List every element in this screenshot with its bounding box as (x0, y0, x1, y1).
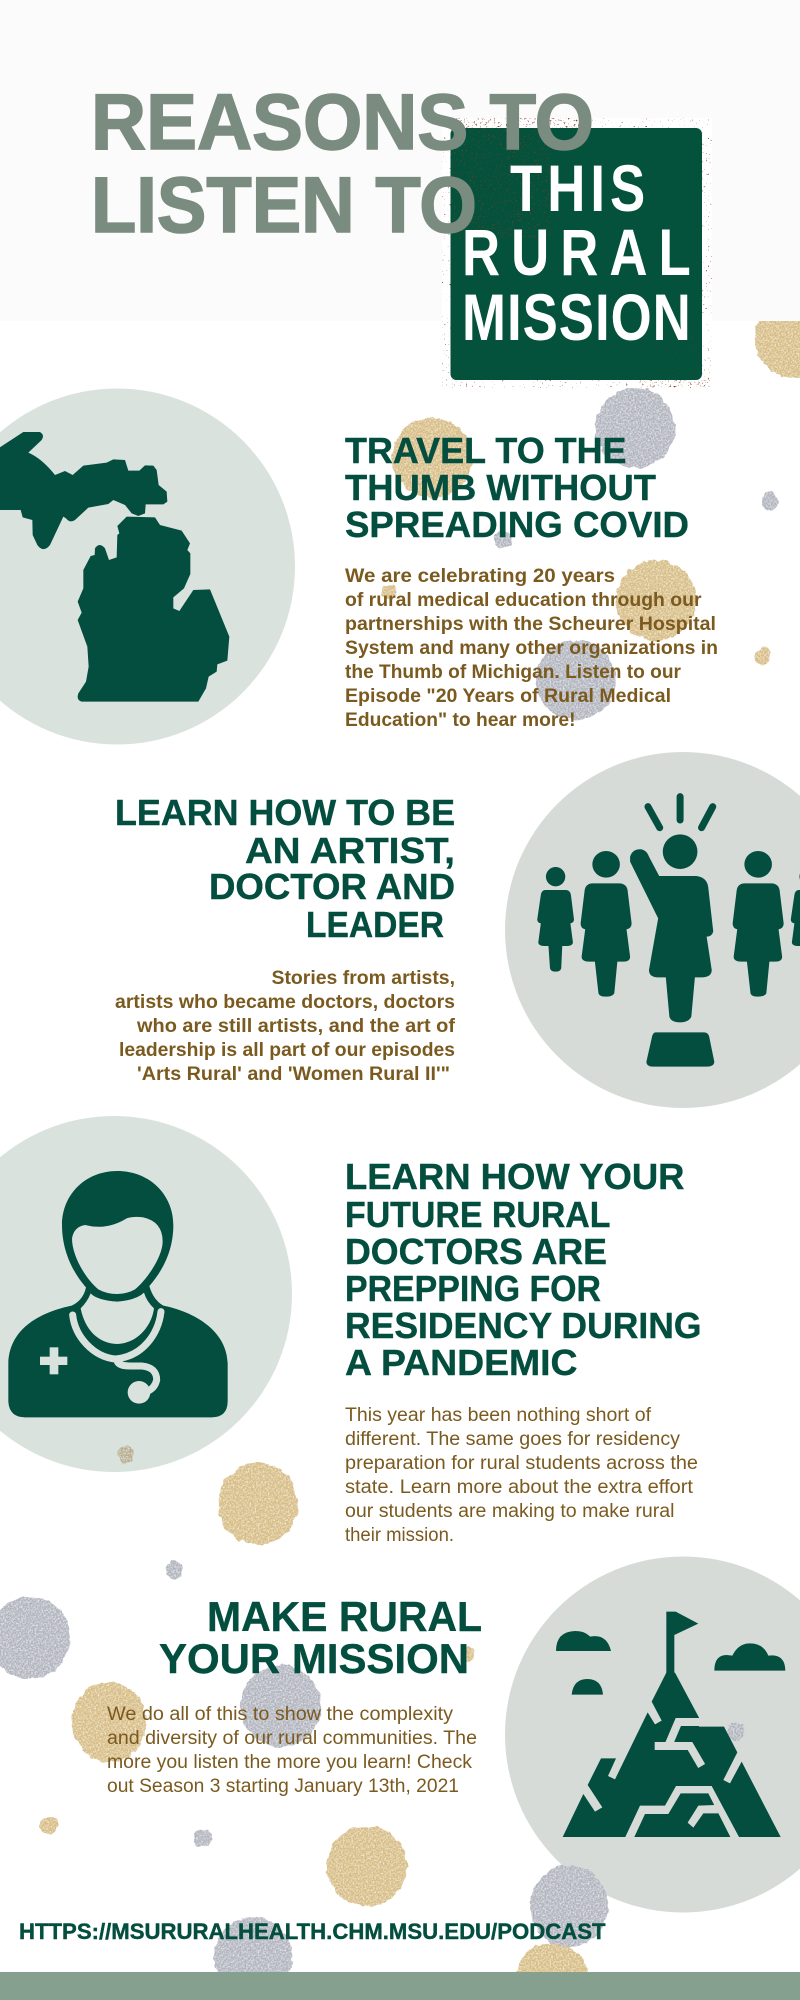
body text: Stories from artists, (272, 968, 455, 989)
silver textured spots (0, 388, 778, 1997)
heading (115, 792, 455, 945)
title: REASONS TO (91, 77, 594, 166)
heading: LEARN HOW TO BE (115, 792, 455, 833)
footer band (0, 1972, 800, 2000)
heading: PREPPING FOR (345, 1268, 601, 1309)
body text: 'Arts Rural' and 'Women Rural II'" (137, 1064, 450, 1085)
heading: TRAVEL TO THE (345, 430, 626, 471)
circle: section 1 (0, 388, 295, 744)
body text (107, 1704, 477, 1797)
circle: section 3 (0, 1116, 292, 1472)
icon: group of people with leader (537, 797, 800, 1067)
heading (345, 430, 689, 545)
body text: leadership is all part of our episodes (119, 1040, 455, 1061)
body text: Education" to hear more! (345, 710, 576, 731)
body text: who are still artists, and the art of (136, 1016, 456, 1037)
title (91, 77, 594, 249)
circle: section 2 (505, 752, 800, 1108)
sign: this rural mission (442, 118, 712, 388)
body text: Episode "20 Years of Rural Medical (345, 686, 671, 707)
body text (345, 566, 718, 731)
body text: preparation for rural students across the (345, 1453, 698, 1474)
sign text: THIS (510, 151, 645, 225)
body text: We do all of this to show the complexity (107, 1704, 454, 1725)
sign text (462, 151, 691, 354)
heading: AN ARTIST, (245, 830, 455, 871)
heading (345, 1156, 702, 1383)
header band (0, 0, 800, 321)
body text: the Thumb of Michigan. Listen to our (345, 662, 682, 683)
body text: different. The same goes for residency (345, 1429, 681, 1450)
body text: This year has been nothing short of (345, 1405, 652, 1426)
heading: MAKE RURAL (207, 1593, 482, 1640)
heading: SPREADING COVID (345, 504, 689, 545)
sign text: RURAL (462, 215, 691, 289)
circle: section 4 (505, 1556, 800, 1912)
heading: A PANDEMIC (345, 1342, 578, 1383)
body text: state. Learn more about the extra effort (345, 1477, 694, 1498)
body text (115, 968, 456, 1085)
heading: LEARN HOW YOUR (345, 1156, 684, 1197)
body text: We are celebrating 20 years (345, 566, 615, 587)
heading: YOUR MISSION (159, 1635, 469, 1682)
heading: LEADER (306, 904, 444, 945)
icon: doctor with stethoscope (8, 1171, 228, 1417)
body text: more you listen the more you learn! Check (107, 1752, 473, 1773)
sign text: MISSION (462, 280, 691, 354)
body text: System and many other organizations in (345, 638, 718, 659)
body text: our students are making to make rural (345, 1501, 674, 1522)
heading: THUMB WITHOUT (345, 467, 656, 508)
body text: their mission. (345, 1525, 454, 1546)
body text: artists who became doctors, doctors (115, 992, 455, 1013)
panel: future rural doctors (8, 1156, 701, 1546)
title: LISTEN TO (91, 160, 477, 249)
icon: michigan map (0, 432, 229, 702)
panel: travel to the thumb (0, 430, 718, 731)
icon: mountain with flag and clouds (556, 1612, 785, 1838)
heading: DOCTORS ARE (345, 1231, 607, 1272)
heading (159, 1593, 482, 1682)
body text: out Season 3 starting January 13th, 2021 (107, 1776, 459, 1797)
heading: FUTURE RURAL (345, 1194, 610, 1235)
heading: DOCTOR AND (209, 866, 455, 907)
body text (345, 1405, 698, 1546)
panel: artist doctor leader (115, 792, 800, 1085)
panel: make rural your mission (107, 1593, 785, 1838)
body text: partnerships with the Scheurer Hospital (345, 614, 716, 635)
body text: of rural medical education through our (345, 590, 702, 611)
body text: and diversity of our rural communities. The (107, 1728, 477, 1749)
heading: RESIDENCY DURING (345, 1305, 702, 1346)
circle backdrops (0, 388, 800, 1912)
podcast url: HTTPS://MSURURALHEALTH.CHM.MSU.EDU/PODCAST (19, 1919, 606, 1944)
